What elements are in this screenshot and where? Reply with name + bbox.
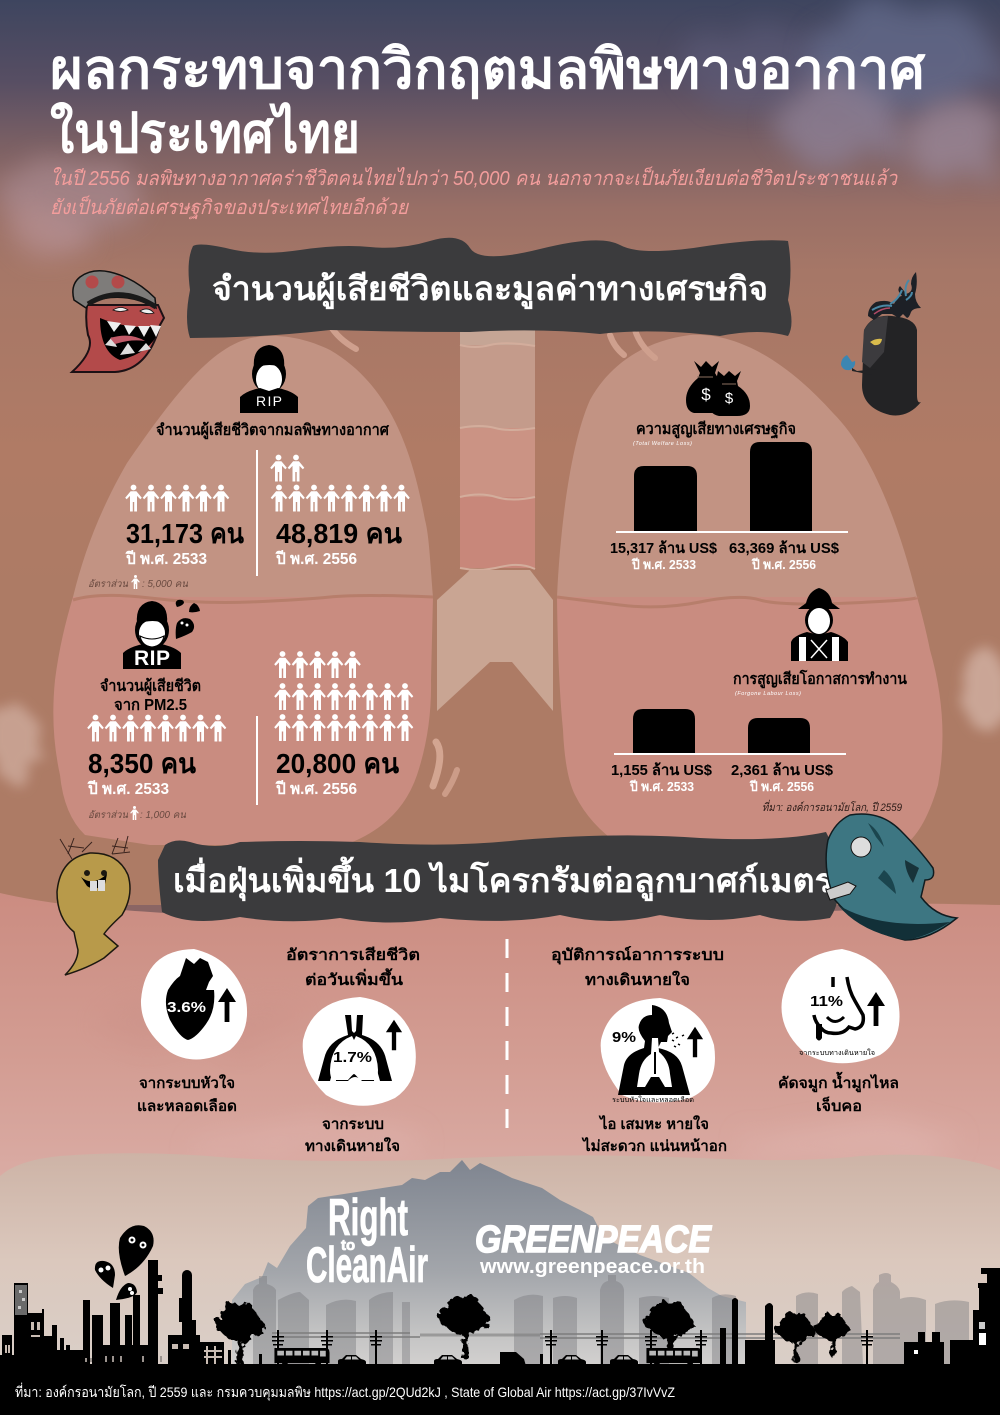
stat: labour loss 2556 bbox=[731, 762, 834, 794]
heading: PM2.5 deaths: จำนวนผู้เสียชีวิต bbox=[100, 677, 201, 697]
distant city bbox=[253, 1273, 969, 1365]
heading bbox=[286, 946, 420, 989]
panel: nose symptoms bbox=[778, 949, 900, 1115]
value: 3.6%: 3.6% bbox=[167, 999, 206, 1016]
banner: deaths and economic value: จำนวนผู้เสียชีวิตและมูลค่าทางเศรษกิจ bbox=[212, 270, 768, 310]
scale note bbox=[88, 575, 189, 590]
caption: cardiovascular: จากระบบหัวใจ bbox=[139, 1074, 235, 1092]
bar chart: labour loss bbox=[614, 709, 846, 755]
utility wires bbox=[272, 1333, 900, 1338]
stat: 8,350: ปี พ.ศ. 2533 bbox=[87, 779, 169, 798]
stat: welfare loss 2533: 15,317 ล้าน US$ bbox=[610, 540, 718, 557]
caption: cardiovascular: และหลอดเลือด bbox=[137, 1098, 237, 1115]
icon: money bags: $ bbox=[725, 390, 734, 407]
footer band bbox=[0, 1364, 1000, 1415]
banner: when dust rises 10 µg bbox=[158, 832, 838, 922]
stat: 20,800: 20,800 คน bbox=[276, 748, 399, 779]
polluted mound silhouette bbox=[232, 1160, 746, 1365]
scale note: : 5,000 คน bbox=[142, 579, 189, 590]
stat: 31,173 bbox=[125, 518, 244, 568]
arrow up bbox=[218, 988, 236, 1022]
icon: masked RIP man: RIP bbox=[134, 647, 170, 670]
caption bbox=[581, 1114, 727, 1155]
stat: 8,350: 8,350 คน bbox=[88, 748, 196, 779]
stat: labour loss 2556: 2,361 ล้าน US$ bbox=[731, 762, 834, 779]
icon group: people 2533 PM2.5 bbox=[87, 715, 226, 742]
stat: welfare loss 2556: ปี พ.ศ. 2556 bbox=[751, 557, 816, 572]
small label: ระบบหัวใจและหลอดเลือด bbox=[612, 1095, 694, 1104]
caption: ไอ เสมหะ หายใจ bbox=[598, 1114, 709, 1133]
source note: ที่มา: องค์การอนามัยโลก, ปี 2559 bbox=[762, 799, 902, 814]
arrow up bbox=[386, 1020, 402, 1050]
divider: dashed bbox=[506, 927, 508, 1131]
caption: เจ็บคอ bbox=[816, 1096, 862, 1115]
heading: ทางเดินหายใจ bbox=[585, 970, 690, 989]
logo: Right to Clean Air: Right bbox=[328, 1189, 408, 1247]
stat: 31,173: 31,173 คน bbox=[126, 518, 244, 549]
caption: respiratory: ทางเดินหายใจ bbox=[305, 1137, 400, 1155]
heading: welfare loss: ความสูญเสียทางเศรษฐกิจ bbox=[636, 420, 796, 440]
caption: respiratory bbox=[305, 1116, 400, 1155]
stat: 8,350 bbox=[87, 748, 196, 798]
stat: 31,173: ปี พ.ศ. 2533 bbox=[125, 549, 207, 568]
heading: PM2.5 deaths: จาก PM2.5 bbox=[114, 697, 187, 714]
left lung bbox=[53, 325, 457, 845]
caption bbox=[778, 1071, 899, 1115]
caption: ไม่สะดวก แน่นหน้าอก bbox=[581, 1136, 727, 1155]
heading bbox=[551, 946, 724, 989]
icon: RIP man: RIP bbox=[256, 393, 282, 409]
icon: heart bbox=[166, 958, 214, 1040]
panel: deaths from air pollution bbox=[88, 345, 410, 590]
pink mottling bbox=[90, 995, 960, 1158]
trachea and bronchi bbox=[437, 325, 553, 711]
blob bbox=[601, 998, 715, 1102]
panel: deaths from PM2.5 bbox=[87, 600, 413, 821]
blob bbox=[782, 949, 900, 1063]
banner: deaths and economic value bbox=[187, 238, 792, 338]
heading: deaths from air pollution: จำนวนผู้เสียชีวิตจากมลพิษทางอากาศ bbox=[156, 421, 390, 441]
subtitle bbox=[50, 166, 899, 220]
label: forgone labour loss: (Forgone Labour Loss) bbox=[735, 691, 801, 697]
lower pink background bbox=[0, 893, 1000, 1200]
heading: อุบัติการณ์อาการระบบ bbox=[551, 946, 724, 965]
arrow up bbox=[867, 992, 885, 1026]
stat: 48,819: 48,819 คน bbox=[276, 518, 402, 549]
panel: economic welfare loss bbox=[610, 361, 848, 572]
value: 9%: 9% bbox=[612, 1029, 636, 1046]
stat: labour loss 2533 bbox=[611, 762, 713, 794]
city buildings right bbox=[904, 1268, 1000, 1375]
icon group: people 2533 bbox=[125, 485, 229, 512]
stat: labour loss 2533: 1,155 ล้าน US$ bbox=[611, 762, 713, 779]
panel: respiratory death rate bbox=[286, 946, 420, 1155]
icon: worker bbox=[791, 588, 848, 661]
panel: forgone labour loss bbox=[611, 588, 907, 814]
monster: red mushroom-hat bbox=[72, 271, 164, 372]
stat: 48,819 bbox=[275, 518, 402, 568]
scale note: : 1,000 คน bbox=[140, 810, 187, 821]
background sky bbox=[0, 0, 1000, 905]
monster: black smoke stack bbox=[841, 272, 921, 415]
icon: person lungs bbox=[618, 1005, 690, 1095]
monster: pollution blobs bbox=[95, 1225, 154, 1300]
arrow up bbox=[687, 1027, 703, 1057]
banner: when dust rises 10 µg: เมื่อฝุ่นเพิ่มขึ้น 10 ไมโครกรัมต่อลูกบาศก์เมตร bbox=[173, 856, 833, 902]
stat: labour loss 2533: ปี พ.ศ. 2533 bbox=[629, 779, 694, 794]
monster: yellow buck-teeth bbox=[57, 836, 130, 975]
cloud smoke bbox=[0, 0, 1000, 783]
heading: main title: ในประเทศไทย bbox=[50, 101, 360, 164]
heading: อัตราการเสียชีวิต bbox=[286, 946, 420, 964]
subtitle: ในปี 2556 มลพิษทางอากาศคร่าชีวิตคนไทยไปกว่า 50,000 คน นอกจากจะเป็นภัยเงียบต่อชีวิตประชาชนแล้ว bbox=[50, 166, 899, 190]
caption: cardiovascular bbox=[137, 1074, 237, 1115]
panel: respiratory symptoms bbox=[551, 946, 727, 1155]
value: 1.7%: 1.7% bbox=[333, 1049, 372, 1066]
blob bbox=[303, 997, 416, 1106]
icon: money bags: $ bbox=[701, 385, 711, 404]
heading: ต่อวันเพิ่มขึ้น bbox=[305, 968, 403, 989]
heading: PM2.5 deaths bbox=[100, 677, 201, 714]
label: total welfare loss: (Total Welfare Loss) bbox=[633, 441, 692, 447]
icon group: people 2556 bbox=[270, 455, 410, 512]
small label: จากระบบทางเดินหายใจ bbox=[799, 1048, 875, 1057]
logo: Right to Clean Air: to bbox=[341, 1237, 355, 1254]
caption: respiratory: จากระบบ bbox=[322, 1116, 384, 1133]
stat: welfare loss 2533 bbox=[610, 540, 718, 572]
scale note: อัตราส่วน bbox=[88, 810, 129, 821]
poles, buses and cars bbox=[228, 1298, 873, 1366]
scale note bbox=[88, 806, 187, 821]
footer source: ที่มา: องค์กรอนามัยโลก, ปี 2559 และ กรมควบคุมมลพิษ https://act.gp/2QUd2kJ , State of Global Air https://act.gp/37IvVvZ bbox=[15, 1383, 675, 1401]
smog band bbox=[0, 1153, 1000, 1370]
website: www.greenpeace.or.th bbox=[479, 1256, 705, 1278]
icon: RIP man bbox=[240, 345, 298, 413]
icon group: people 2556 PM2.5 bbox=[274, 651, 413, 741]
caption: คัดจมูก น้ำมูกไหล bbox=[778, 1071, 899, 1093]
right lung bbox=[557, 330, 942, 845]
stat: welfare loss 2533: ปี พ.ศ. 2533 bbox=[631, 557, 696, 572]
stat: 20,800 bbox=[275, 748, 399, 798]
divider bbox=[256, 716, 258, 805]
icon: masked RIP man bbox=[123, 600, 200, 670]
heading: main title: ผลกระทบจากวิกฤตมลพิษทางอากาศ bbox=[50, 38, 926, 100]
icon: lungs bbox=[318, 1015, 392, 1081]
stat: 20,800: ปี พ.ศ. 2556 bbox=[275, 779, 357, 798]
refinery skyline left bbox=[0, 1260, 224, 1365]
stat: welfare loss 2556 bbox=[729, 540, 840, 572]
logo: Right to Clean Air: CleanAir bbox=[306, 1237, 428, 1293]
divider bbox=[256, 450, 258, 576]
bar chart: welfare loss bbox=[616, 442, 848, 533]
logo: Greenpeace: GREENPEACE bbox=[475, 1219, 712, 1261]
icon: money bags bbox=[686, 361, 750, 416]
subtitle: ยังเป็นภัยต่อเศรษฐกิจของประเทศไทยอีกด้วย bbox=[50, 195, 409, 220]
roadside trees bbox=[214, 1295, 850, 1364]
scale note: อัตราส่วน bbox=[88, 579, 129, 590]
icon: nose bbox=[814, 977, 863, 1040]
panel: heart stat bbox=[137, 949, 247, 1115]
stat: labour loss 2556: ปี พ.ศ. 2556 bbox=[749, 779, 814, 794]
logo: Right to Clean Air bbox=[306, 1189, 428, 1293]
monster: teal masked ghost bbox=[826, 814, 957, 940]
value: 11%: 11% bbox=[810, 993, 843, 1010]
blob bbox=[141, 949, 247, 1060]
stat: 48,819: ปี พ.ศ. 2556 bbox=[275, 549, 357, 568]
heading: main title bbox=[50, 38, 926, 164]
heading: labour loss: การสูญเสียโอกาสการทำงาน bbox=[733, 669, 907, 690]
stat: welfare loss 2556: 63,369 ล้าน US$ bbox=[729, 540, 840, 557]
